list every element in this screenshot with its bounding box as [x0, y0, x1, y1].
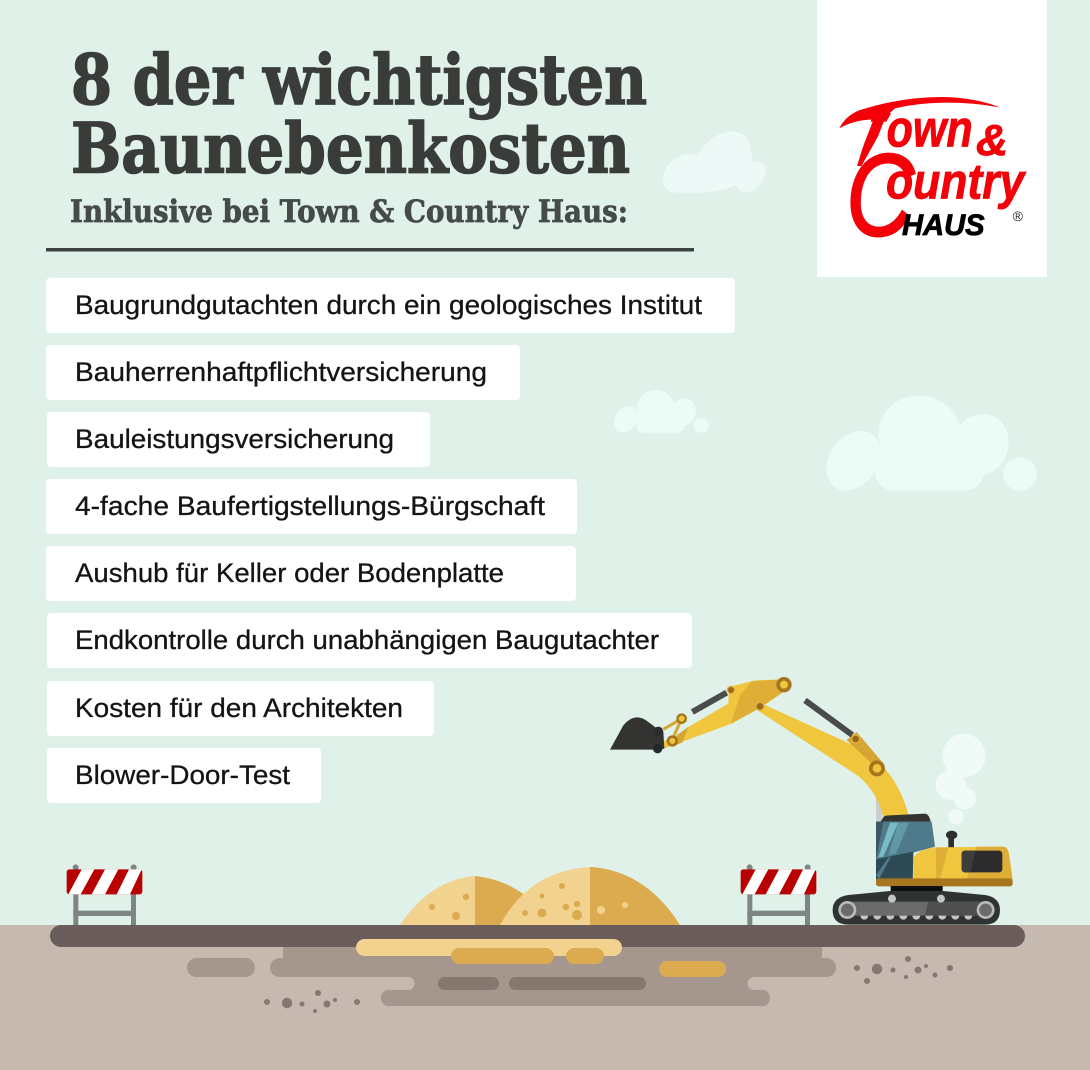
logo panel: [817, 0, 1047, 277]
cloud: small middle: [609, 386, 708, 437]
excavator: [610, 677, 1013, 925]
road: [50, 925, 1025, 947]
list item 4: 4-fache Baufertigstellungs-Bürgschaft: [75, 491, 546, 521]
list item 6: [47, 613, 692, 668]
cloud: top: [663, 131, 766, 193]
list item 3: [47, 412, 430, 467]
sand layers: [356, 939, 726, 990]
ground: [0, 925, 1090, 1070]
sand pile: left: [400, 876, 556, 925]
list item 3: Bauleistungsversicherung: [75, 424, 394, 454]
list item 2: Bauherrenhaftpflichtversicherung: [75, 357, 487, 387]
logo: Town & Country Haus: ountry: [886, 153, 1026, 209]
list item 7: [47, 681, 434, 736]
underground layers: [187, 945, 836, 1006]
tracks: [833, 891, 1000, 925]
divider line: [46, 248, 694, 252]
logo: Town & Country Haus: C: [846, 130, 915, 261]
barrier: left: [67, 864, 142, 925]
title: 8 der wichtigsten: [71, 40, 647, 121]
title: [71, 40, 647, 190]
list item 7: Kosten für den Architekten: [75, 693, 403, 723]
cloud: large right: [815, 386, 1037, 501]
logo: Town & Country Haus: ®: [1013, 208, 1024, 224]
logo: Town & Country Haus: HAUS: [902, 209, 985, 242]
list item 1: Baugrundgutachten durch ein geologisches Institut: [75, 290, 703, 320]
cab and engine housing: [876, 814, 1013, 891]
pebbles: right: [854, 956, 953, 984]
logo: Town & Country Haus: &: [976, 117, 1008, 165]
barrier: right: [741, 864, 816, 925]
logo: Town & Country Haus: own: [887, 100, 973, 158]
list item 1: [46, 278, 735, 333]
list item 4: [46, 479, 577, 534]
boom: [756, 700, 909, 822]
pebbles: left: [264, 990, 360, 1013]
list item 5: [46, 546, 576, 601]
logo: Town & Country Haus: [839, 97, 1027, 238]
subtitle: Inklusive bei Town & Country Haus:: [70, 194, 628, 230]
list item 8: [47, 748, 321, 803]
list item 6: Endkontrolle durch unabhängigen Baugutachter: [75, 625, 659, 655]
logo: Town & Country Haus: T: [838, 98, 907, 183]
list item 2: [46, 345, 520, 400]
title: Baunebenkosten: [71, 108, 630, 190]
smoke: [936, 734, 986, 824]
list item 5: Aushub für Keller oder Bodenplatte: [75, 558, 504, 588]
sand pile: right: [500, 867, 680, 925]
list item 8: Blower-Door-Test: [75, 760, 291, 790]
arm and bucket: [610, 677, 792, 753]
